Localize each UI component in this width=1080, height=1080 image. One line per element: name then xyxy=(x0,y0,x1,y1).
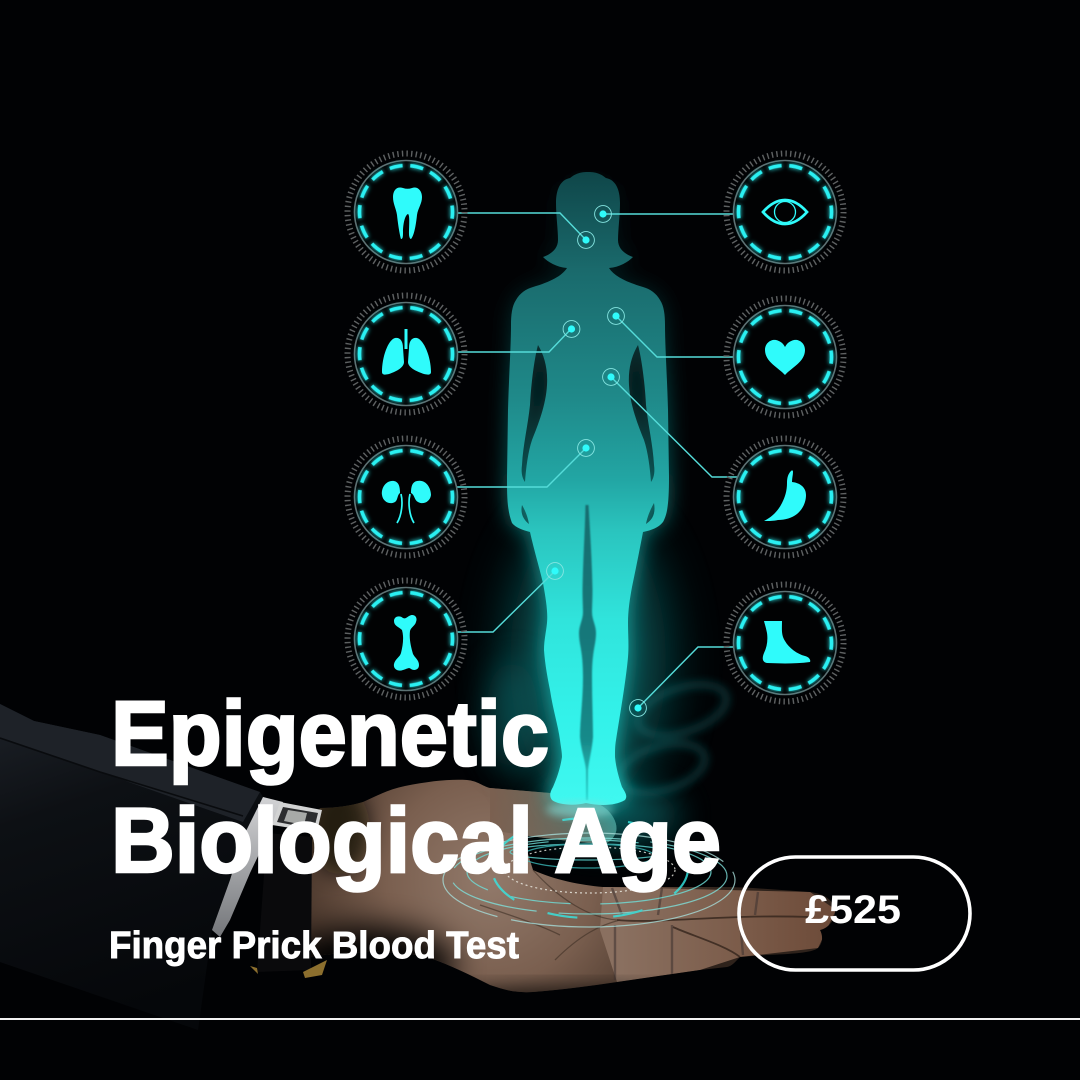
smoke swirls xyxy=(614,675,733,801)
price pill: £525 xyxy=(805,888,901,932)
connector lines xyxy=(457,213,738,708)
holographic palm rings xyxy=(443,818,735,927)
bottom rule xyxy=(0,1018,1080,1020)
hologram leg glow xyxy=(486,515,680,843)
icon: tooth xyxy=(348,154,464,270)
wristwatch xyxy=(250,802,327,978)
hand xyxy=(310,780,836,992)
icon: lungs xyxy=(348,296,464,412)
icon: heart xyxy=(726,298,844,416)
thumb xyxy=(490,788,617,844)
title xyxy=(111,683,721,892)
shirt cuff xyxy=(212,797,283,937)
title: Biological Age xyxy=(111,790,721,892)
icon: eye xyxy=(726,154,844,270)
icon: bone xyxy=(348,580,464,698)
title: Epigenetic xyxy=(111,683,549,785)
icon: stomach xyxy=(726,438,844,556)
suit sleeve xyxy=(0,704,263,1030)
body marker dots xyxy=(547,206,646,716)
icon: kidneys xyxy=(348,438,464,556)
price pill xyxy=(739,857,970,970)
thumb overlapping feet xyxy=(546,802,614,818)
icon: foot xyxy=(726,584,844,702)
subtitle: Finger Prick Blood Test xyxy=(109,925,519,967)
human body hologram xyxy=(507,172,669,805)
